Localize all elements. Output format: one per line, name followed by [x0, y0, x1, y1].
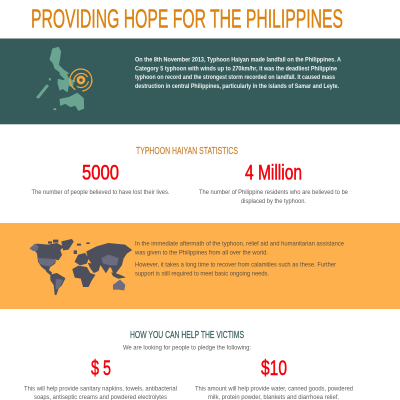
- text block: introduction: typhoon on record and the strongest storm recorded on landfall. It caused mass: [135, 74, 335, 81]
- text block: introduction: [135, 56, 341, 90]
- text block: introduction: Category 5 typhoon with winds up to 270km/hr, it was the deadliest Philippine: [135, 66, 337, 72]
- heading: how to help: HOW YOU CAN HELP THE VICTIMS: [130, 329, 244, 341]
- stat: 4 Million: 4 Million: [245, 162, 302, 184]
- stat: 5000: 5000: [82, 162, 119, 184]
- panel: how to help: [24, 329, 353, 400]
- text: $10 description: This amount will help provide water, canned goods, powdered: [195, 386, 353, 392]
- panel: typhoon introduction: [0, 38, 400, 125]
- text: $10 description: [195, 386, 353, 400]
- heading: statistics: TYPHOON HAIYAN STATISTICS: [136, 146, 238, 157]
- text: 4 Million description: [199, 189, 349, 205]
- amount: $10: $10: [261, 357, 287, 380]
- amount: $5: $ 5: [91, 357, 111, 380]
- panel: statistics: [32, 146, 349, 205]
- text: 4 Million description: The number of Philippine residents who are believed to be: [199, 189, 349, 196]
- text block: aid: In the immediate aftermath of the typhoon, relief aid and humanitarian assistance: [135, 240, 344, 248]
- text block: aid: However, it takes a long time to recover from calamities such as these. Further: [135, 262, 337, 268]
- text: 5000 description: The number of people believed to have lost their lives.: [32, 189, 170, 196]
- text: $5 description: This will help provide sanitary napkins, towels, antibacterial: [24, 386, 177, 392]
- icon: Philippines map with typhoon: [37, 47, 92, 110]
- text block: introduction: On the 8th November 2013, Typhoon Haiyan made landfall on the Philippines. A: [135, 56, 341, 64]
- text: 4 Million description: displaced by the typhoon.: [241, 198, 306, 205]
- panel: aid: [0, 223, 400, 309]
- text block: introduction: destruction in central Philippines, particularly in the islands of Samar and Leyte.: [135, 83, 339, 90]
- text block: aid: [134, 240, 344, 278]
- icon: world map: [30, 239, 132, 295]
- text block: aid: support is still required to meet basic ongoing needs.: [135, 270, 269, 278]
- text: $5 description: [24, 386, 177, 400]
- text block: aid: was given to the Philippines from all over the world.: [134, 250, 268, 256]
- text: pledge intro: We are looking for people to pledge the following:: [123, 344, 251, 352]
